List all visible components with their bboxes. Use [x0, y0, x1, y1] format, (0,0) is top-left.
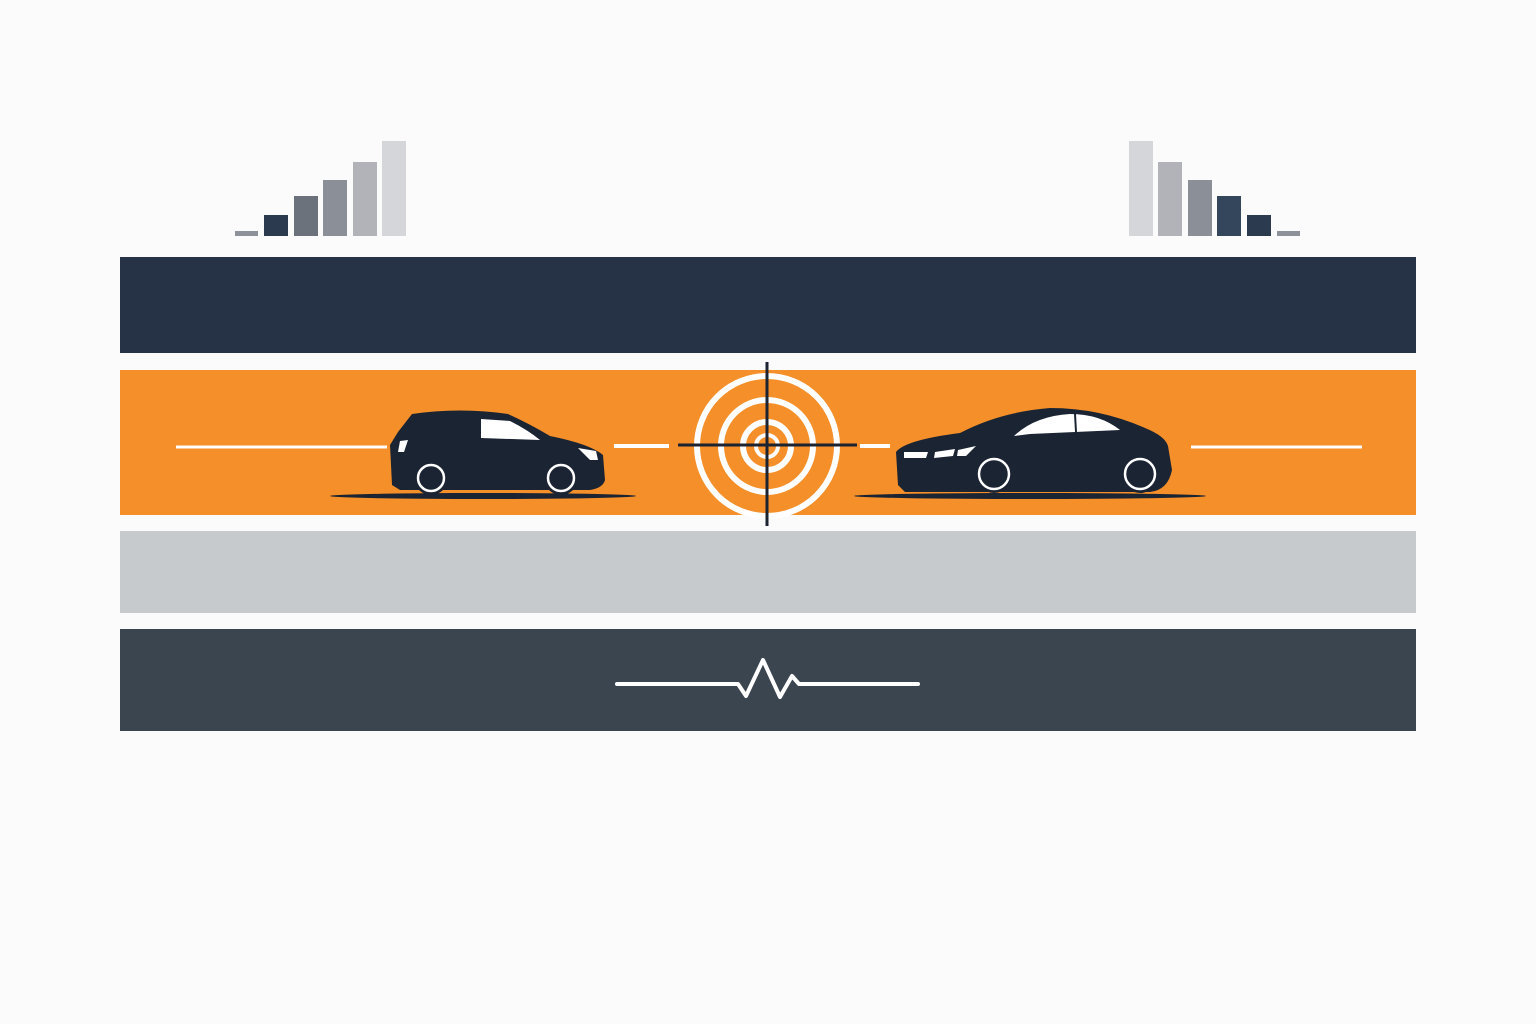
bar chart: ascending left: [235, 141, 406, 236]
icon: target: [678, 362, 857, 526]
panel: orange road band: [120, 362, 1416, 526]
icon: left car: [330, 410, 636, 499]
panel: navy band: [120, 257, 1416, 353]
panel: dark band with heartbeat: [120, 629, 1416, 731]
icon: right car: [854, 408, 1206, 499]
icon: heartbeat line: [617, 660, 918, 697]
bar chart: descending right: [1129, 141, 1300, 236]
panel: gray band: [120, 531, 1416, 613]
